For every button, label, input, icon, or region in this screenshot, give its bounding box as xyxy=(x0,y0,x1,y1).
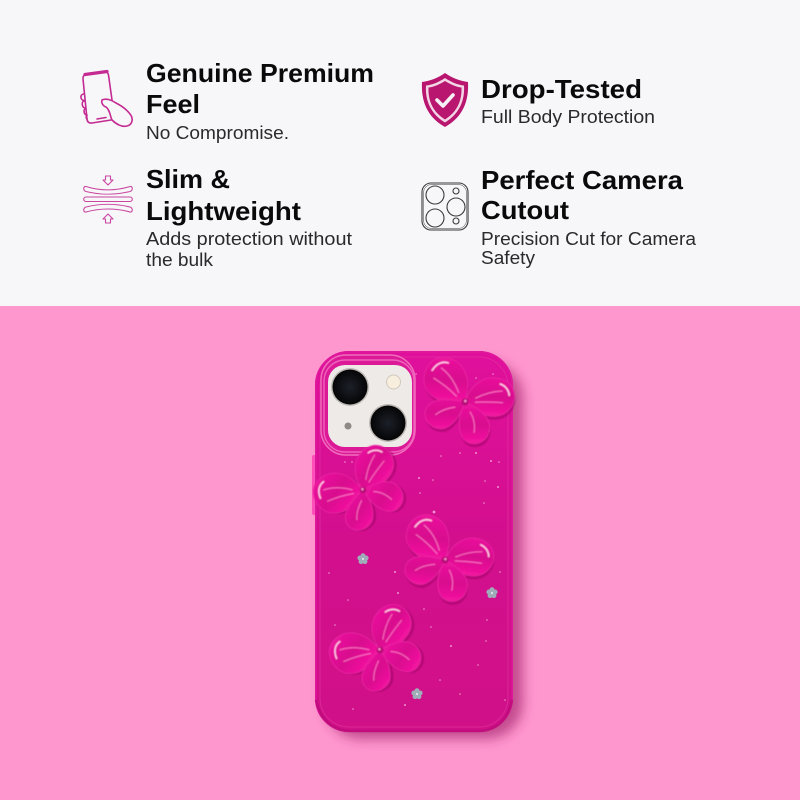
feature: slim and lightweight xyxy=(84,164,352,270)
lens 1 xyxy=(331,368,369,406)
butterfly 3 xyxy=(387,509,502,615)
icon: compression arrows xyxy=(84,176,132,223)
side buttons xyxy=(312,455,317,515)
camera bump xyxy=(320,354,416,456)
flash xyxy=(386,375,400,389)
icon: camera module xyxy=(422,183,468,230)
butterfly 2 xyxy=(306,434,423,548)
feature: genuine premium feel: Feel xyxy=(146,89,200,119)
feature: slim and lightweight: the bulk xyxy=(146,250,214,270)
case body xyxy=(315,351,513,732)
feature: slim and lightweight: Lightweight xyxy=(146,196,301,226)
lens 2 xyxy=(369,404,407,442)
butterfly 1 xyxy=(408,352,522,455)
sparkle dots xyxy=(328,373,506,710)
feature: drop-tested xyxy=(422,73,655,127)
feature: perfect camera cutout: Cutout xyxy=(481,195,569,225)
butterfly 4 xyxy=(322,593,441,709)
silver flower glitter xyxy=(357,553,498,699)
heading: Drop-Tested xyxy=(481,74,642,104)
feature: perfect camera cutout xyxy=(422,165,697,268)
phone case xyxy=(306,351,523,739)
icon: shield with check xyxy=(422,73,468,127)
feature: genuine premium feel xyxy=(81,58,374,143)
top panel background xyxy=(0,0,800,306)
phone drop shadow xyxy=(325,362,523,739)
microphone xyxy=(344,422,352,430)
description: Adds protection without xyxy=(146,229,352,249)
description: Precision Cut for Camera xyxy=(481,229,697,249)
feature: perfect camera cutout: Safety xyxy=(481,248,535,268)
camera plate xyxy=(328,365,412,447)
description: No Compromise. xyxy=(146,123,289,143)
heading: Perfect Camera xyxy=(481,165,684,195)
bottom pink panel background xyxy=(0,306,800,800)
heading: Genuine Premium xyxy=(146,58,374,88)
heading: Slim & xyxy=(146,164,230,194)
description: Full Body Protection xyxy=(481,107,655,127)
icon: hand holding phone xyxy=(81,72,132,126)
